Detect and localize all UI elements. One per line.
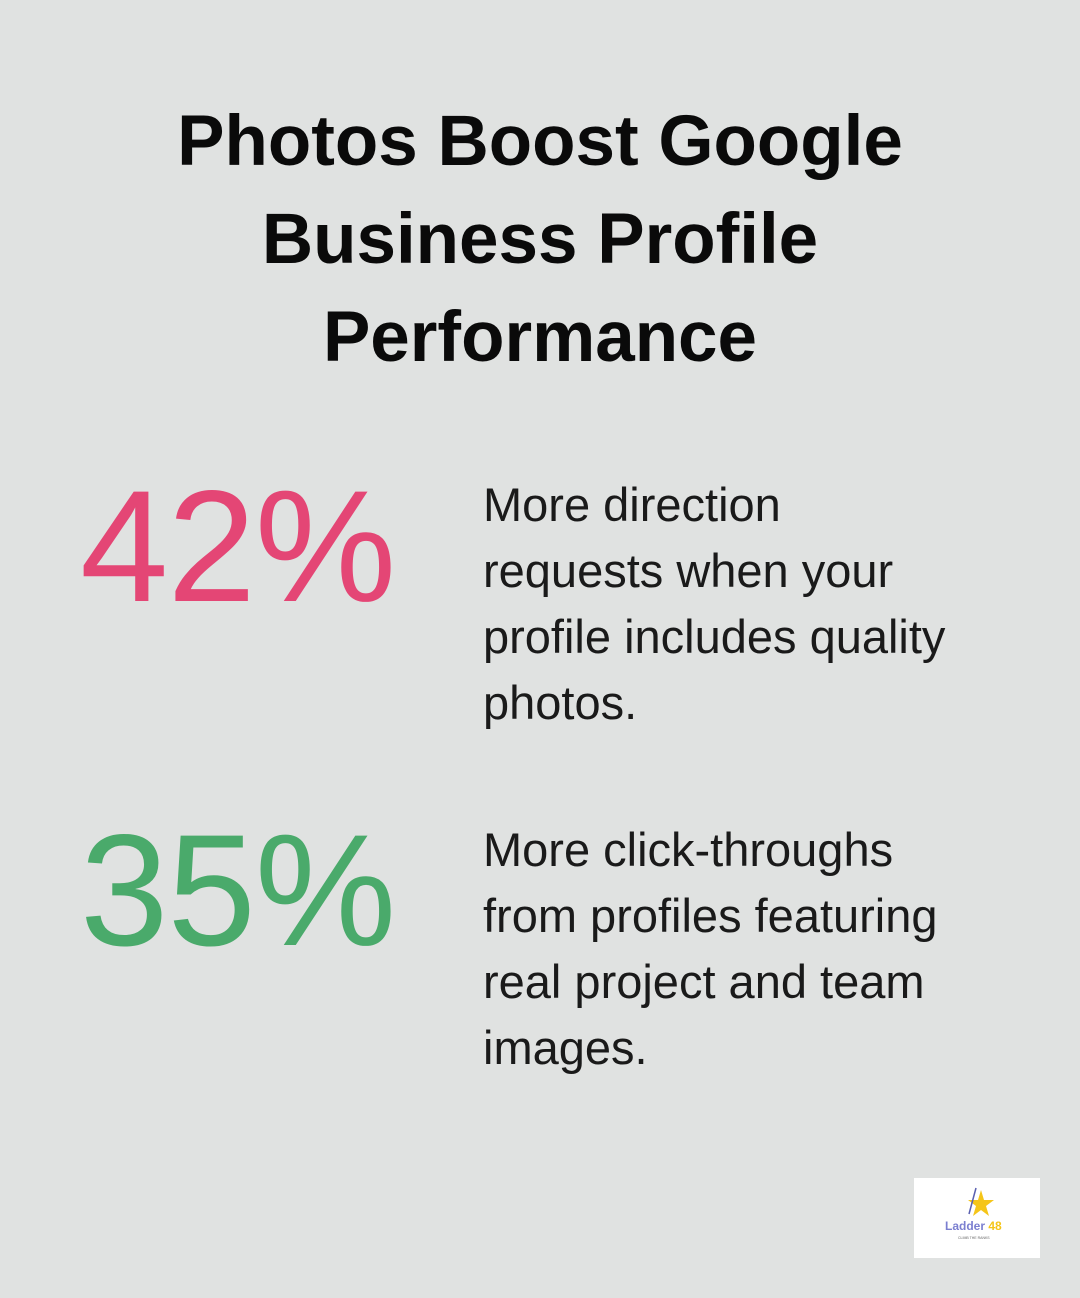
logo text: CLIMB THE RANKS xyxy=(958,1236,990,1240)
title: Photos Boost Google xyxy=(177,102,903,181)
logo text: Ladder 48 xyxy=(945,1219,1002,1233)
text: 42% description xyxy=(483,478,946,729)
icon: star with ladder xyxy=(968,1188,994,1216)
logo text xyxy=(945,1219,1002,1240)
title: Performance xyxy=(323,298,757,377)
stat: 42%: 42% xyxy=(80,457,395,635)
text: 42% description: profile includes quality xyxy=(483,610,945,663)
text: 42% description: More direction xyxy=(483,478,781,531)
text: 35% description xyxy=(483,823,938,1074)
text: 35% description: real project and team xyxy=(483,955,925,1008)
title xyxy=(177,102,903,377)
text: 35% description: images. xyxy=(483,1021,648,1074)
text: 35% description: More click-throughs xyxy=(483,823,893,876)
text: 35% description: from profiles featuring xyxy=(483,889,938,942)
text: 42% description: photos. xyxy=(483,676,637,729)
logo: Ladder 48 xyxy=(914,1178,1040,1258)
title: Business Profile xyxy=(262,200,818,279)
text: 42% description: requests when your xyxy=(483,544,893,597)
stat: 35%: 35% xyxy=(80,801,395,979)
